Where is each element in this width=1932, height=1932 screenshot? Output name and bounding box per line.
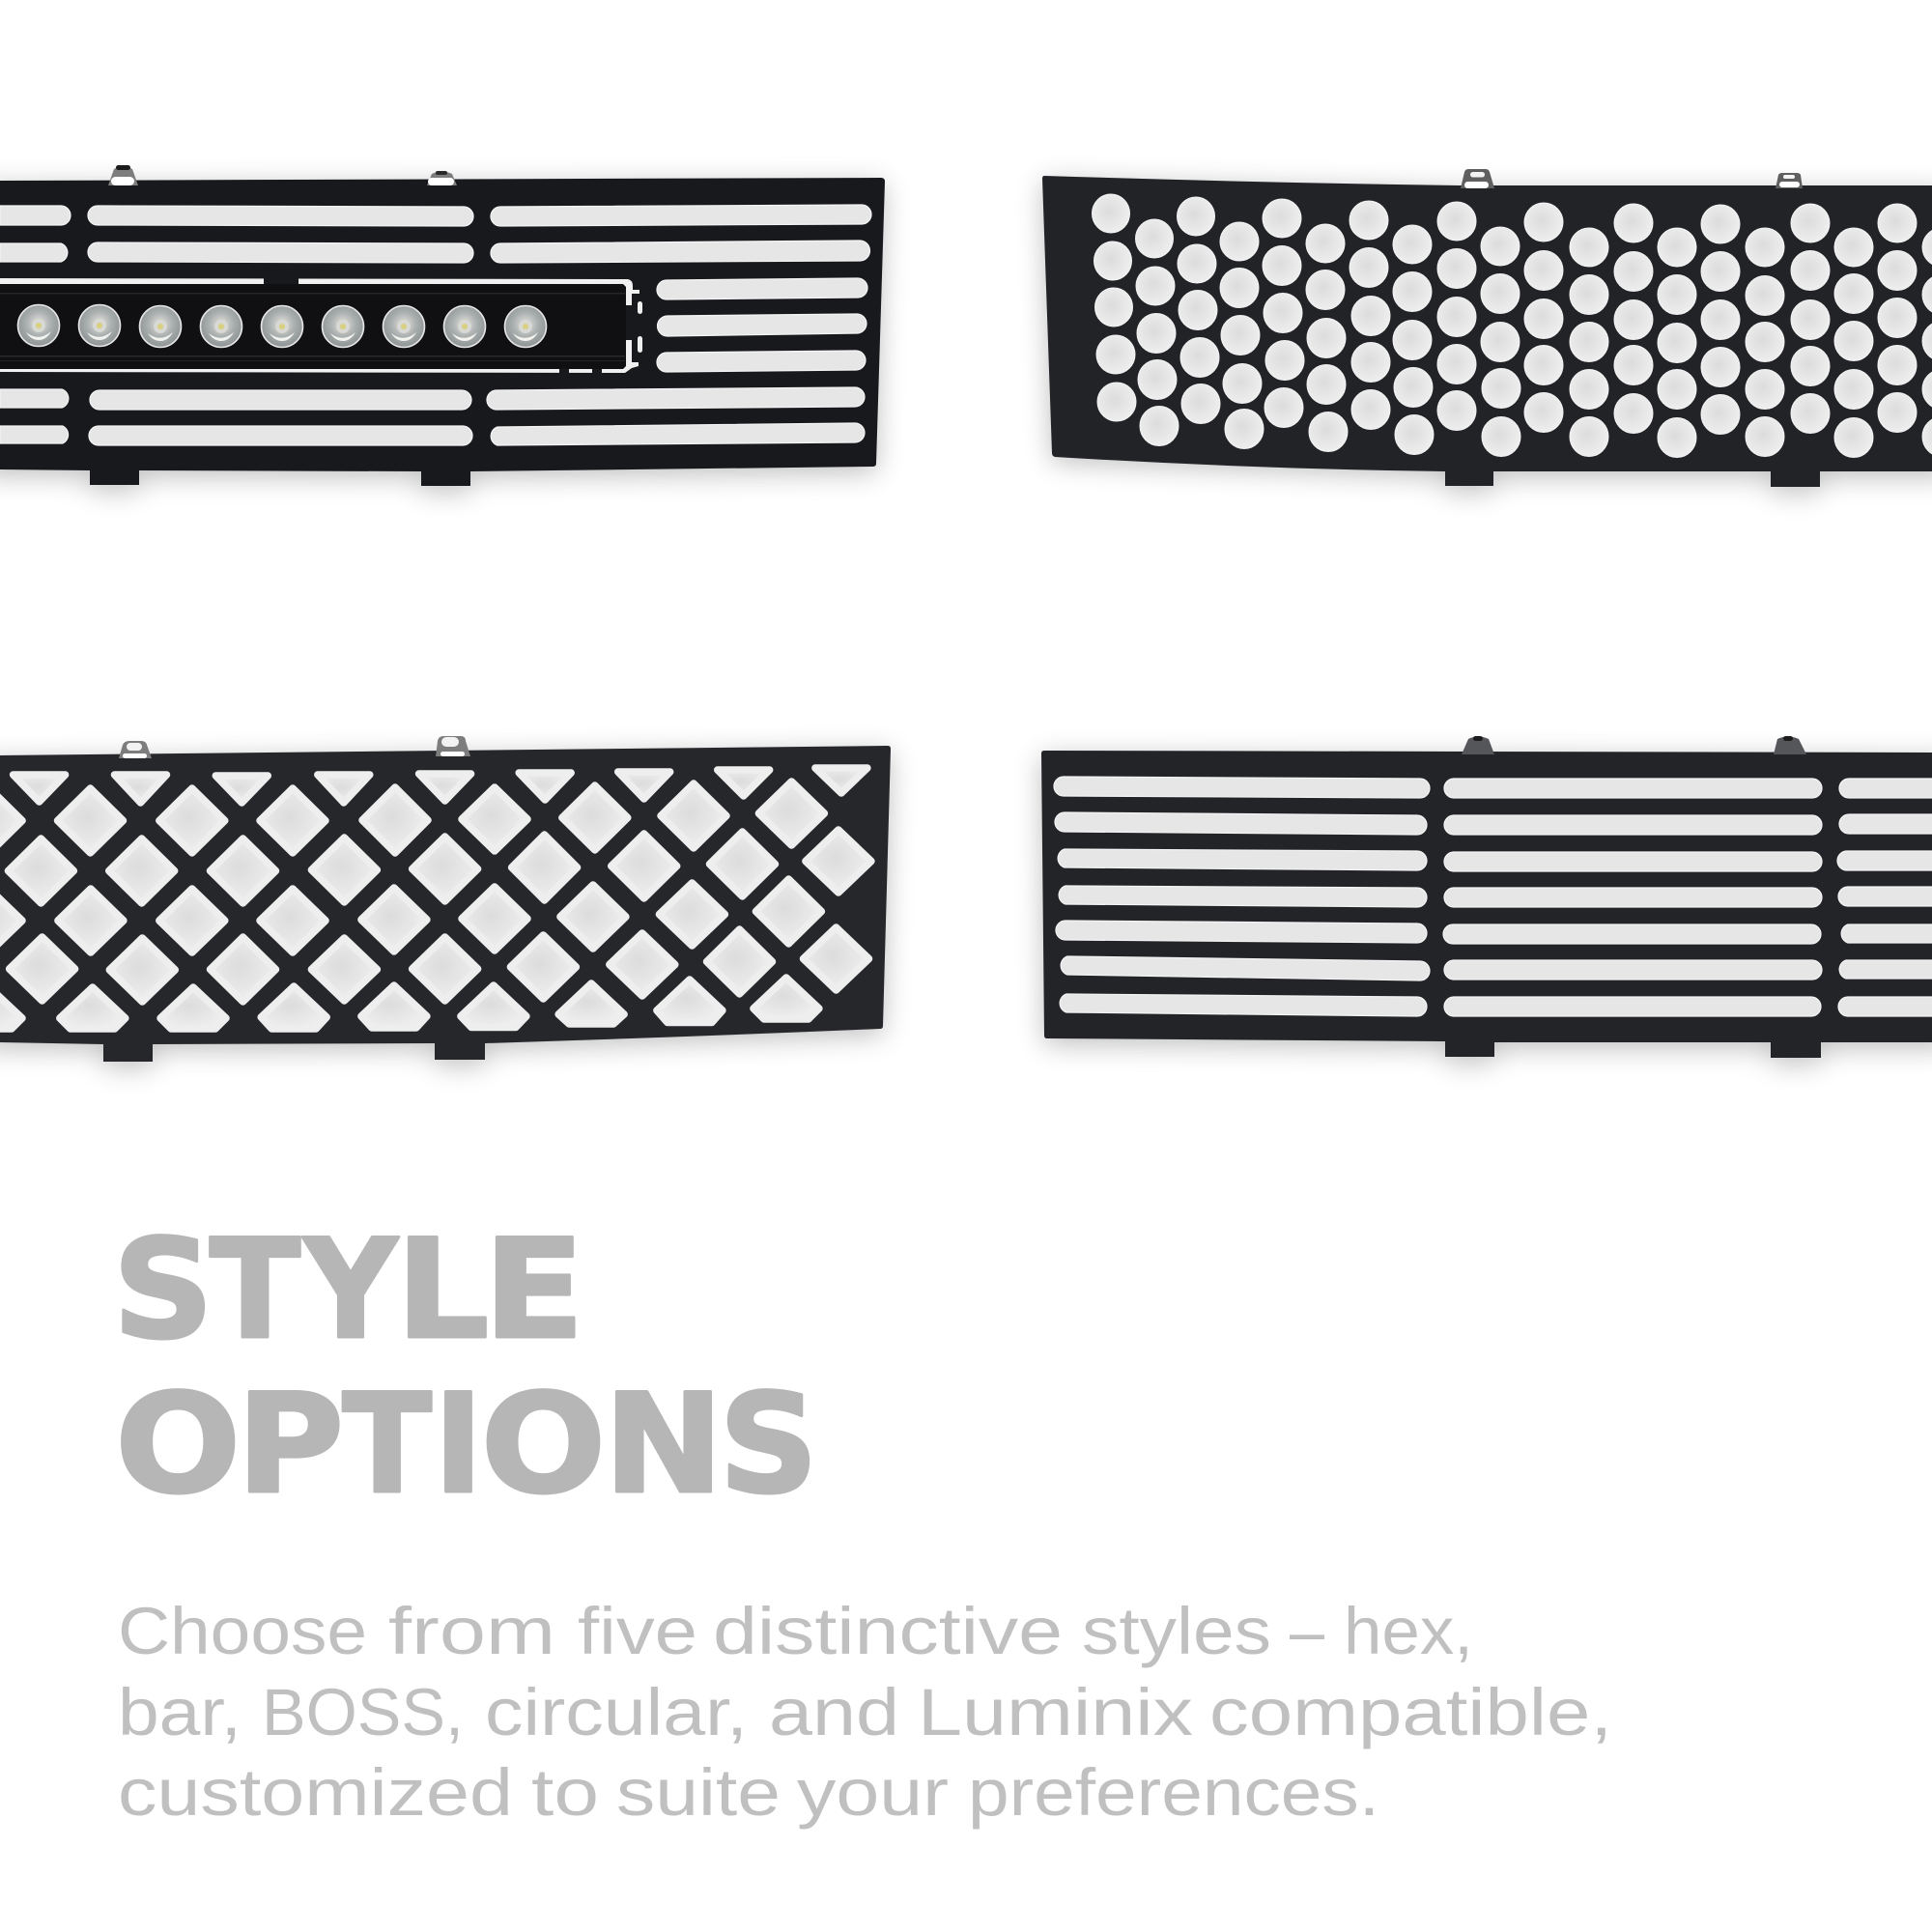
heading line 1: S [112,1210,213,1370]
body text [118,1594,1612,1830]
bar slots [1054,777,1932,1016]
heading line 2: S [719,1365,818,1524]
diamond openings top triangles [14,768,867,803]
clip: mounting tab right [427,171,457,185]
heading line 1: E [483,1210,584,1370]
LED lights [17,305,547,348]
grille body [1041,751,1932,1058]
body line 2: Luminix [918,1675,1193,1749]
body line 3: your [797,1755,949,1830]
heading line 2: N [604,1365,724,1524]
panel: circular grille [1042,169,1932,487]
panel: horizontal bar grille [1041,736,1932,1058]
body line 1: styles [1082,1594,1271,1668]
grille body [0,746,891,1062]
panel: BOSS diamond grille [0,736,891,1062]
body line 3: customized [118,1755,513,1830]
body line 2: compatible, [1209,1675,1612,1749]
heading line 2: I [434,1365,483,1524]
body line 3: suite [616,1755,781,1830]
body line 3: preferences. [968,1755,1379,1830]
diamond openings row 3 [8,830,871,903]
circular holes [1092,194,1932,458]
body line 1: five [578,1594,697,1668]
body line 1: – [1290,1594,1325,1668]
body line 3: to [531,1755,599,1830]
grille body [0,178,885,486]
heading line 1: Y [301,1210,400,1370]
diamond openings row 2 [0,781,824,853]
heading line 1: L [396,1210,489,1370]
clip: mounting tab left [1461,169,1494,188]
body line 2: and [769,1675,899,1749]
bar slots [0,205,871,445]
clip: mounting tab right [1774,736,1806,754]
body line 2: circular, [485,1675,748,1749]
diamond openings row 5 [10,927,869,1002]
light bar housing [0,271,626,369]
body line 1: Choose [118,1594,367,1668]
light bar cutout [0,278,639,373]
heading line 1: T [210,1210,300,1370]
panel: Luminix compatible bar grille [0,165,885,486]
heading line 2: O [481,1365,606,1524]
heading line 2: O [115,1365,241,1524]
body line 2: BOSS, [262,1675,464,1749]
heading line 2: P [236,1365,344,1524]
clip: mounting tab left [1462,736,1494,754]
body line 2: bar, [118,1675,242,1749]
heading line 2: T [342,1365,432,1524]
diamond openings bottom row [0,978,819,1029]
clip: mounting tab left [108,165,138,185]
grille body [1042,176,1932,487]
light bar mount [559,301,645,374]
clip: mounting tab right [436,736,470,756]
body line 1: from [388,1594,555,1668]
body line 1: hex, [1344,1594,1473,1668]
heading: STYLE OPTIONS [112,1210,818,1524]
clip: mounting tab left [119,741,152,758]
clip: mounting tab right [1776,173,1803,188]
diamond openings row 4 [0,879,821,952]
panel: soft shadows behind grilles [0,182,1932,1067]
body line 1: distinctive [713,1594,1063,1668]
